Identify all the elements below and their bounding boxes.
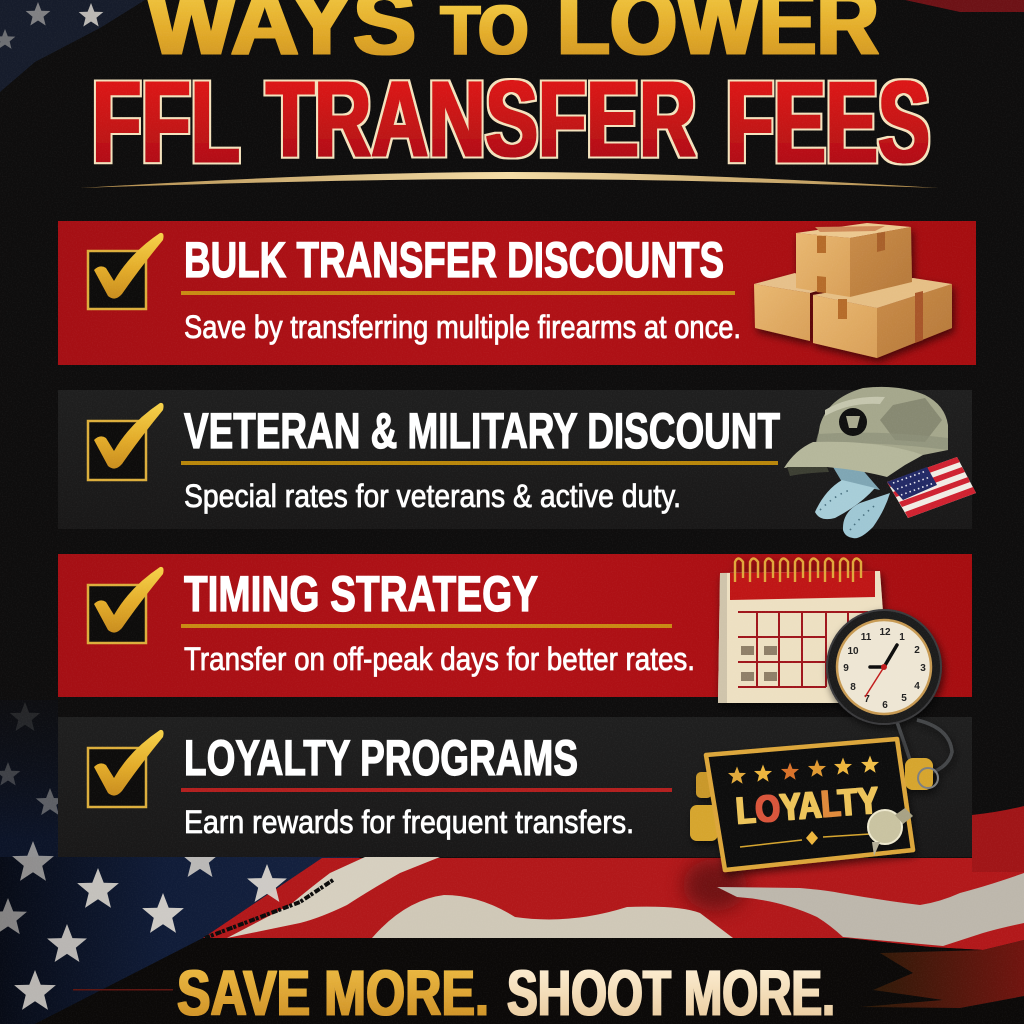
- title underline arc: [80, 172, 938, 188]
- icon: clock: 2: [914, 645, 920, 656]
- footer glow: [860, 940, 1024, 1008]
- description: Special rates for veterans & active duty.: [184, 478, 681, 514]
- title: FFL Transfer Fees: FFL: [92, 57, 240, 187]
- icon: calendar: [718, 558, 883, 703]
- title: FFL Transfer Fees: FEES: [726, 57, 930, 187]
- loyalty wordmark: LOYALTY: [734, 780, 880, 833]
- icon: clock: 3: [920, 663, 926, 674]
- icon: clock: 11: [861, 632, 872, 643]
- icon: military cap and flag: [784, 387, 976, 538]
- icon: clock: 6: [882, 700, 888, 711]
- checkbox 3: [88, 567, 164, 643]
- rating stars: [728, 756, 879, 784]
- icon: clock: [827, 610, 952, 775]
- description: Save by transferring multiple firearms at once.: [184, 309, 741, 345]
- title: Ways to Lower: [147, 0, 879, 74]
- description: Earn rewards for frequent transfers.: [184, 804, 634, 840]
- heading: LOYALTY PROGRAMS: [184, 730, 578, 786]
- icon: clock: 9: [843, 663, 849, 674]
- icon: clock: 12: [879, 627, 891, 638]
- icon: clock: 5: [901, 693, 907, 704]
- stars: [0, 2, 287, 1010]
- title: FFL Transfer Fees: [92, 57, 930, 187]
- icon: clock: 7: [864, 694, 870, 705]
- checkbox 1: [88, 233, 164, 309]
- panel: loyalty programs: [58, 717, 972, 857]
- heading: BULK TRANSFER DISCOUNTS: [184, 232, 724, 288]
- underline: [181, 788, 672, 792]
- footer slogan: [177, 957, 835, 1024]
- checkbox 2: [88, 403, 164, 480]
- icon: clock: 1: [899, 632, 905, 643]
- calendar rings: [735, 558, 861, 582]
- underline: [181, 291, 735, 295]
- icon: clock: 4: [914, 681, 920, 692]
- icon: clock: 8: [850, 682, 856, 693]
- panel: timing strategy: [58, 554, 972, 697]
- icon: clock: 10: [847, 646, 859, 657]
- heading: VETERAN & MILITARY DISCOUNT: [184, 403, 780, 459]
- underline: [181, 461, 778, 465]
- panel: bulk transfer discounts: [58, 221, 976, 365]
- footer rule: [73, 989, 173, 990]
- icon: loyalty badge: [690, 739, 938, 870]
- American flag: [887, 457, 976, 518]
- checkbox 4: [88, 730, 164, 807]
- icon: stacked boxes: [754, 223, 952, 358]
- underline: [181, 624, 672, 628]
- panel: veteran and military discount: [58, 387, 976, 538]
- description: Transfer on off-peak days for better rates.: [184, 641, 695, 677]
- heading: TIMING STRATEGY: [184, 566, 538, 622]
- title: FFL Transfer Fees: TRANSFER: [266, 58, 696, 179]
- footer band: [35, 938, 1024, 1024]
